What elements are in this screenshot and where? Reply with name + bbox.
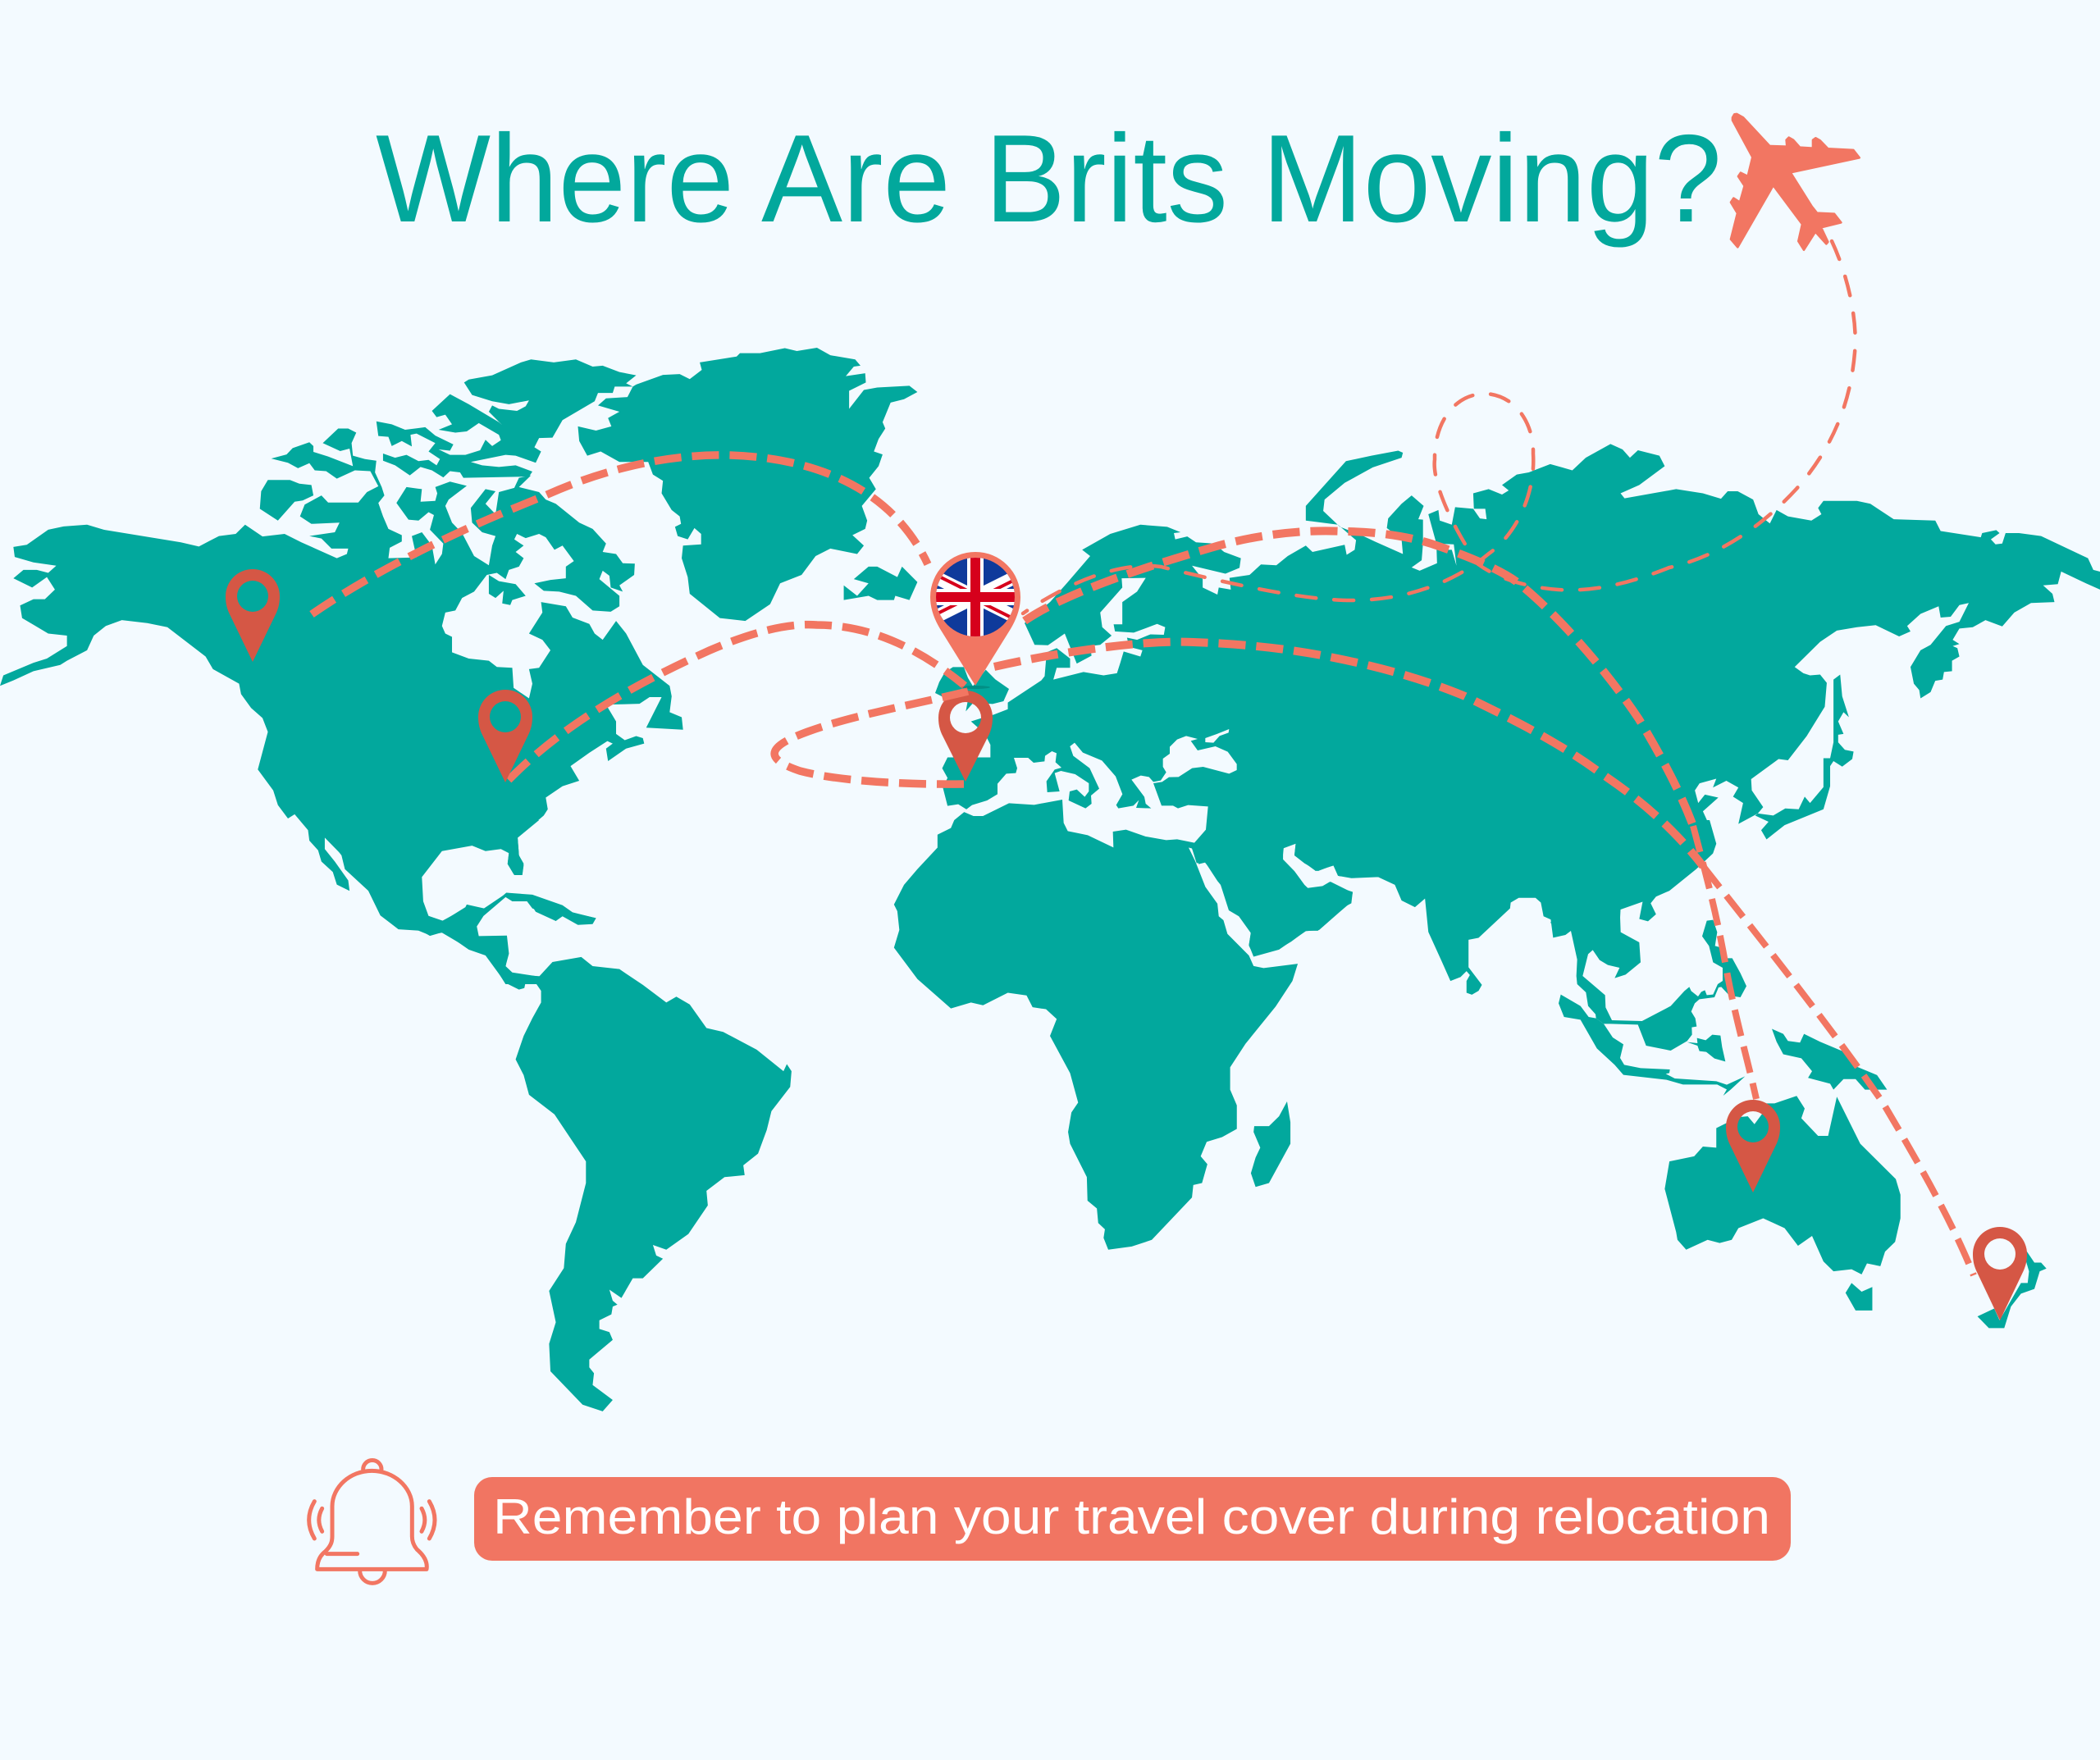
route: uk to australia	[1025, 531, 1756, 1099]
pin: uk with flag	[930, 552, 1020, 689]
pin: spain	[938, 691, 993, 782]
greenland	[578, 348, 917, 621]
southampton island	[489, 575, 526, 605]
oceania	[1664, 1028, 2047, 1328]
pin: australia	[1726, 1100, 1780, 1192]
banner: reminder	[474, 1477, 1791, 1561]
route: uk to canada	[312, 455, 928, 614]
ellesmere islands	[377, 359, 637, 478]
southeast asia	[1550, 917, 1746, 1096]
iceland	[844, 567, 917, 600]
pin: canada	[226, 569, 280, 662]
icon: plane	[1731, 114, 1860, 250]
banks island	[260, 480, 313, 521]
icon: union jack	[934, 558, 1016, 636]
mediterranean and black sea	[964, 544, 1457, 847]
title: Where Are Brits Moving?	[376, 109, 1722, 248]
tasmania	[1846, 1283, 1872, 1311]
world map	[0, 348, 2100, 1411]
banner: reminder: Remember to plan your travel cover during relocation	[493, 1489, 1770, 1544]
south asia	[1189, 820, 1716, 995]
eurasia north	[943, 444, 2100, 839]
icon: bell	[309, 1460, 435, 1583]
route: thin flight path from plane	[1023, 241, 1856, 613]
australia	[1664, 1096, 1901, 1274]
route: uk to spain	[774, 691, 968, 784]
japan	[1755, 674, 1854, 839]
south america	[325, 820, 792, 1411]
route: uk to usa	[509, 625, 965, 780]
new guinea	[1772, 1028, 1887, 1090]
africa and arabia	[894, 800, 1378, 1250]
madagascar	[1251, 1101, 1290, 1187]
new zealand	[1978, 1247, 2047, 1328]
route: uk to new zealand	[994, 642, 1974, 1275]
uk and ireland	[935, 667, 1009, 711]
pin: new zealand	[1973, 1227, 2027, 1320]
north america	[0, 348, 917, 984]
pin: usa	[478, 690, 532, 782]
sumatra and java	[1559, 995, 1745, 1096]
sulawesi	[1687, 1035, 1725, 1061]
